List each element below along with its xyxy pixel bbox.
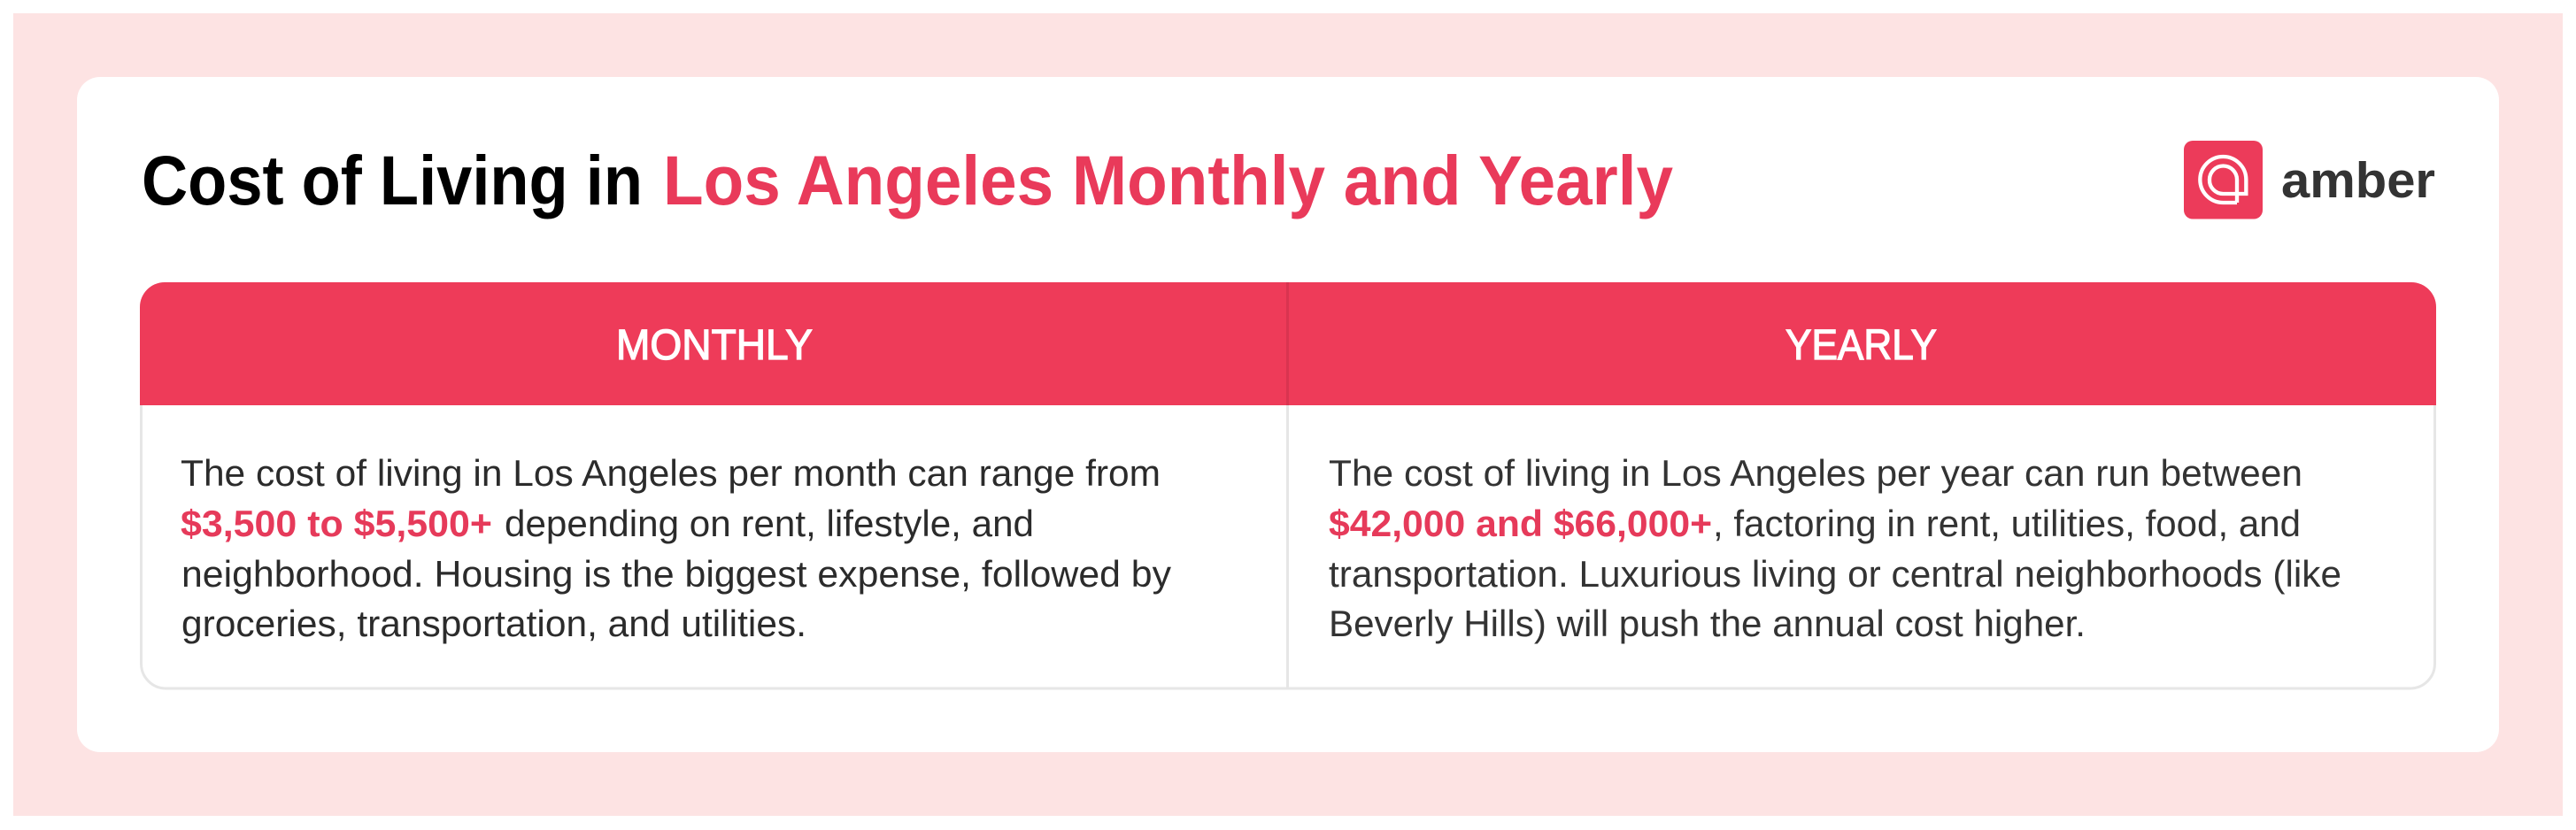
text block: monthly: $3,500 to $5,500+ — [181, 503, 492, 544]
white card — [77, 77, 2499, 752]
text block: monthly: depending on rent, lifestyle, and — [505, 503, 1034, 544]
text block: yearly: The cost of living in Los Angeles per year can run between — [1329, 452, 2302, 494]
title: Cost of Living in — [142, 141, 643, 219]
text block: yearly: $42,000 and $66,000+ — [1329, 503, 1712, 544]
title — [142, 141, 1673, 219]
text block: monthly: neighborhood. Housing is the biggest expense, followed by — [181, 553, 1171, 595]
logo wordmark: amber — [2281, 152, 2435, 209]
text block: monthly: groceries, transportation, and utilities. — [181, 603, 806, 644]
table header band — [140, 282, 2436, 405]
header divider — [1286, 282, 1289, 405]
title: Los Angeles Monthly and Yearly — [663, 141, 1673, 219]
text block: yearly: transportation. Luxurious living or central neighborhoods (like — [1329, 553, 2341, 595]
logo: amber — [2184, 141, 2435, 219]
table body outline — [142, 283, 2434, 688]
text block: monthly: The cost of living in Los Angeles per month can range from — [181, 452, 1161, 494]
column heading: monthly: MONTHLY — [616, 322, 813, 369]
text block: yearly — [1329, 452, 2341, 644]
table body divider — [1286, 405, 1289, 688]
text block: yearly: , factoring in rent, utilities, food, and — [1713, 503, 2301, 544]
comparison table — [140, 282, 2436, 688]
text block: monthly — [181, 452, 1171, 644]
text block: yearly: Beverly Hills) will push the annual cost higher. — [1329, 603, 2086, 644]
icon: amber mark — [2184, 141, 2263, 219]
column heading: yearly: YEARLY — [1785, 322, 1937, 369]
